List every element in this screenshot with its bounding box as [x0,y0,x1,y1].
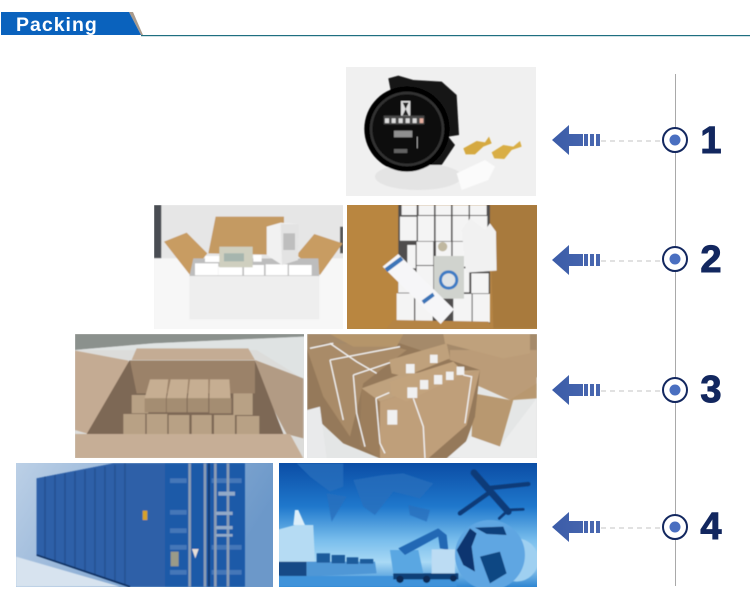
step 3: arrow, connector, marker, number [552,369,722,411]
header: Packing title banner [1,12,750,36]
photo: strapped stack of cartons [307,334,537,458]
marker [663,128,687,152]
photo: white carton with counter [154,205,344,330]
arrow [552,125,600,155]
photo: hour meter with terminals [346,67,536,196]
photo: cardboard box with small cartons [75,334,305,458]
step 4: arrow, connector, marker, number [552,506,722,548]
photo: blue shipping container [16,463,273,587]
photo: global logistics collage [275,463,538,590]
connector [601,527,662,529]
marker [663,515,687,539]
step 1: arrow, connector, marker, number [552,120,722,162]
number: 3 [700,369,722,411]
connector [601,390,662,392]
step 2: arrow, connector, marker, number [552,239,722,281]
arrow [552,512,600,542]
connector [601,140,662,142]
number: 1 [700,120,722,162]
arrow [552,375,600,405]
marker [663,247,687,271]
connector [601,260,662,262]
photo: open box with timer and manual [347,205,538,329]
marker [663,378,687,402]
number: 4 [700,506,722,548]
timeline vertical line [675,74,676,586]
title: Packing [16,14,98,36]
number: 2 [700,239,722,281]
arrow [552,245,600,275]
